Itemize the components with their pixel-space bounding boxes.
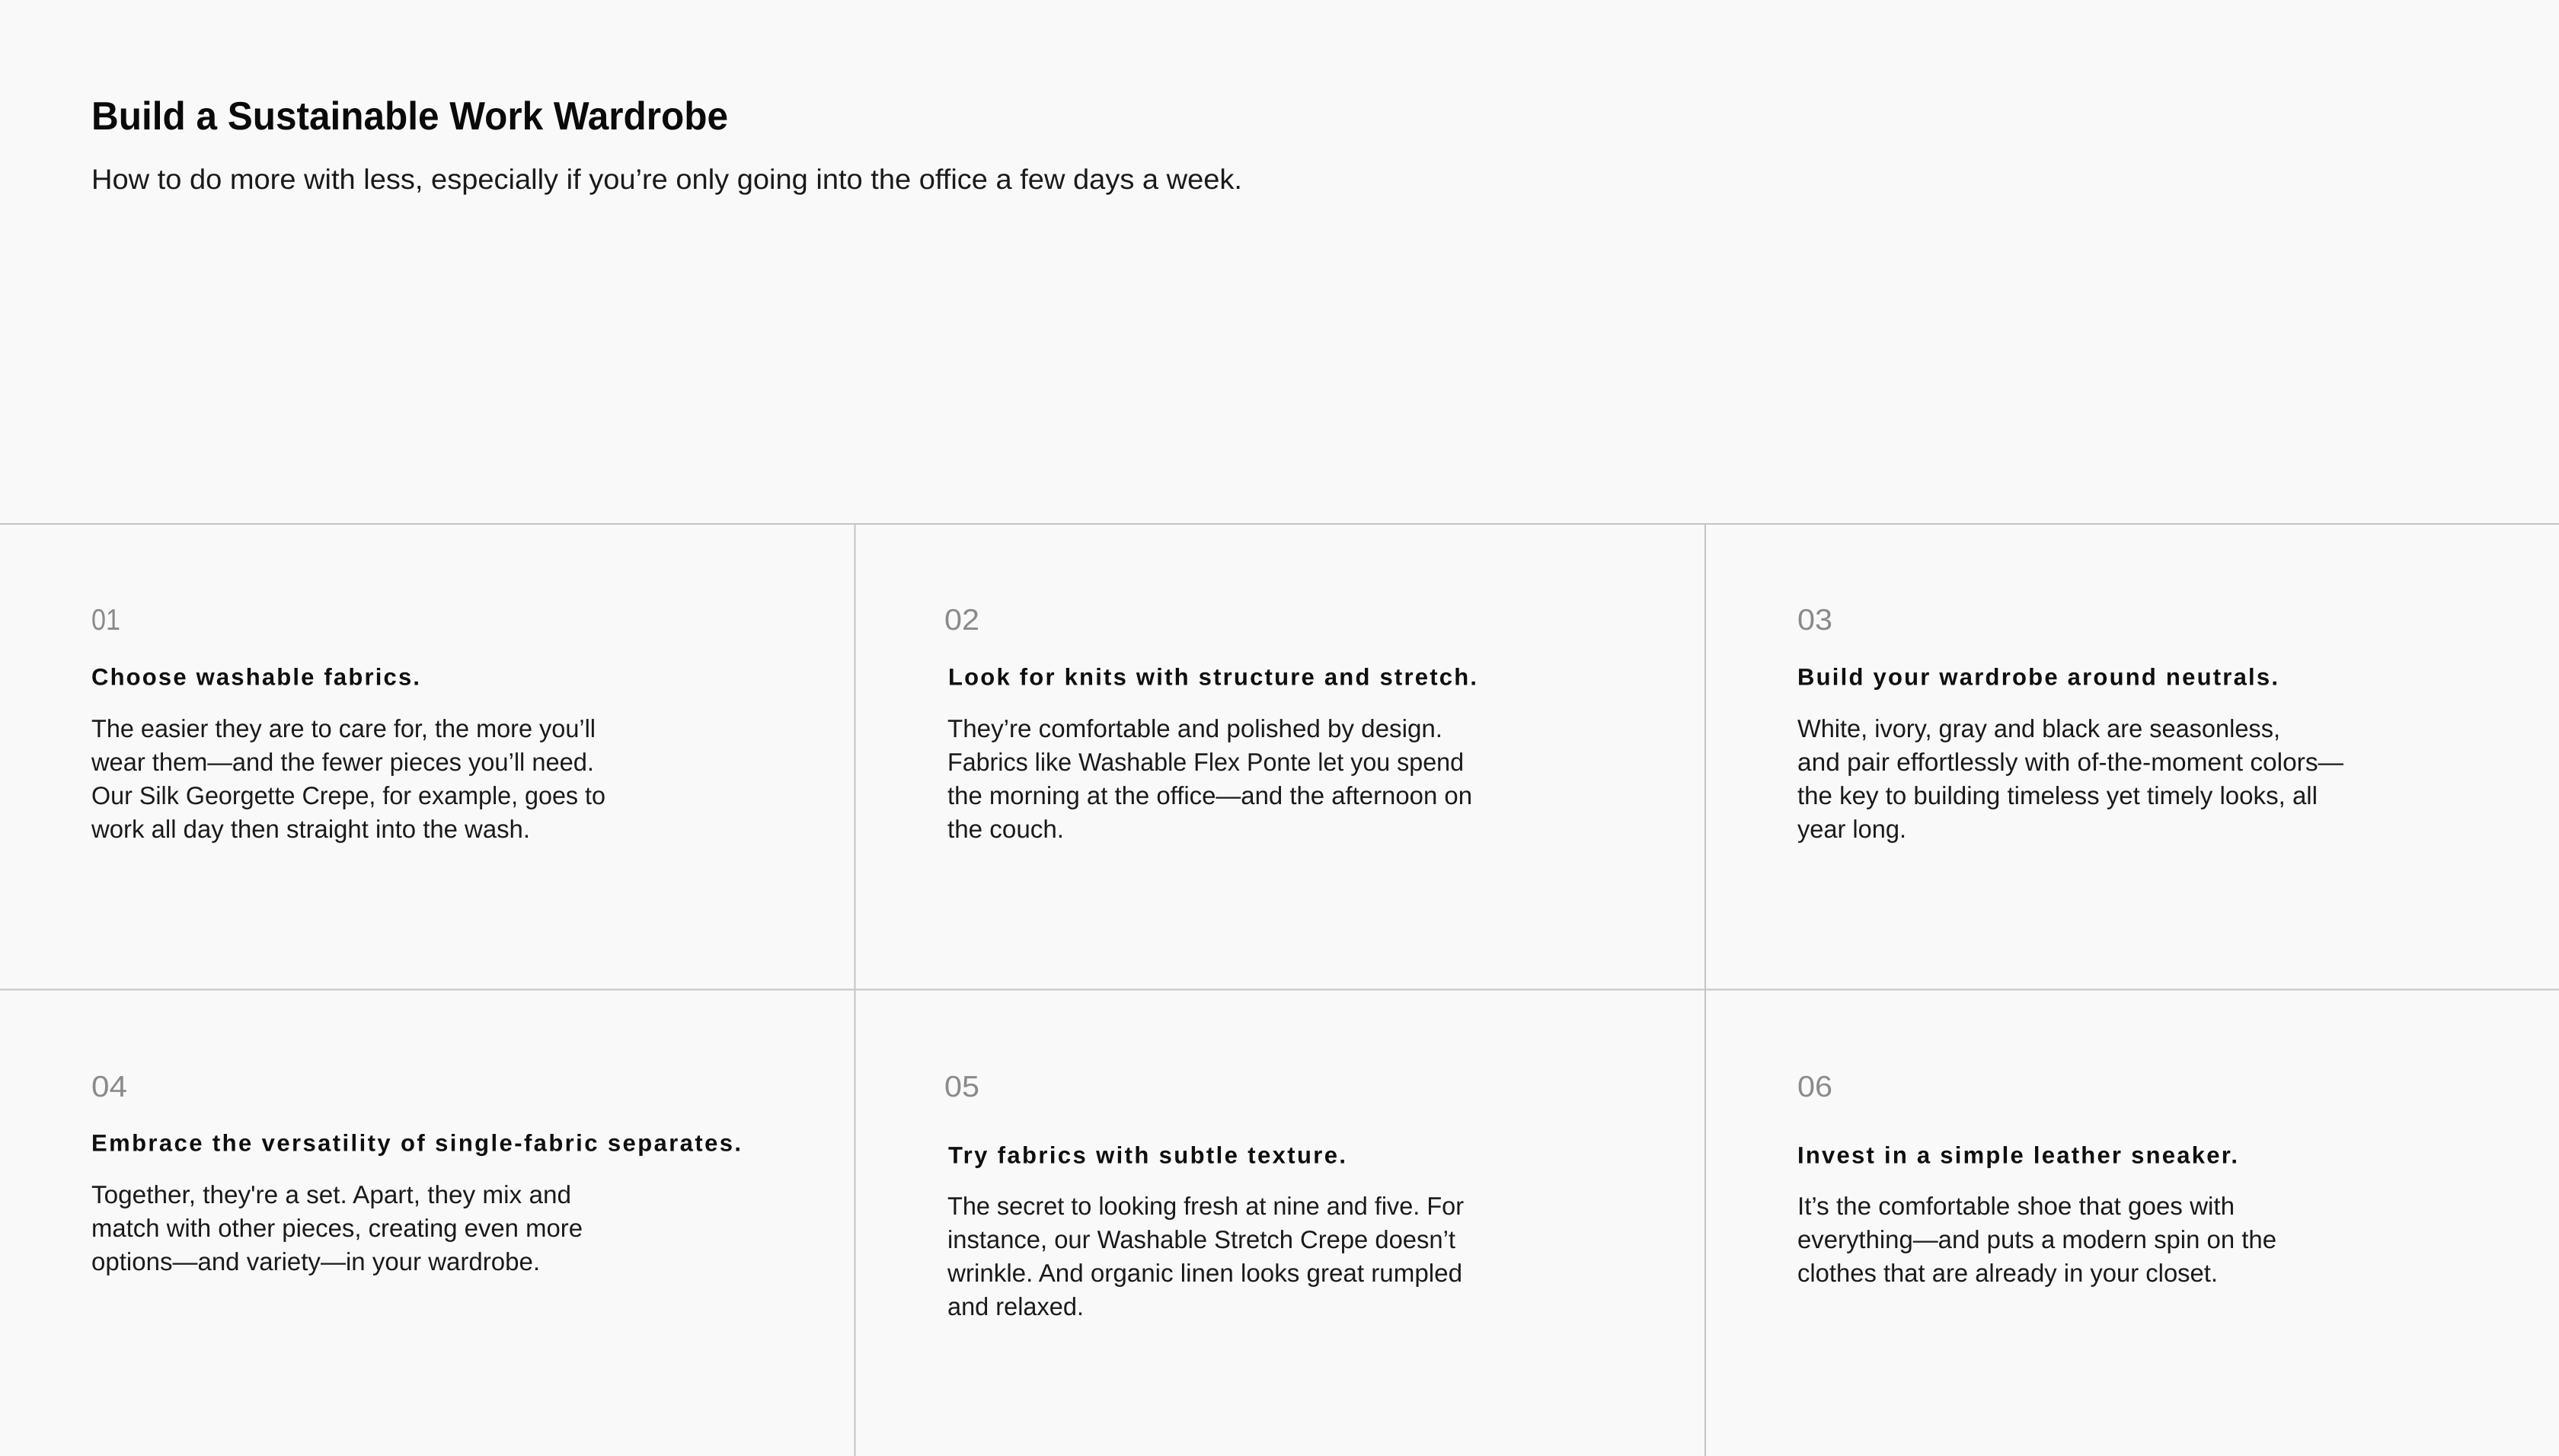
number 04: 04 (91, 1071, 127, 1103)
number 03: 03 (1797, 604, 1832, 637)
body 01: work all day then straight into the wash. (91, 815, 530, 843)
heading 06: Invest in a simple leather sneaker. (1797, 1142, 2238, 1168)
body 06: clothes that are already in your closet. (1797, 1259, 2218, 1287)
panel: tip 01 (91, 604, 605, 843)
body 03: the key to building timeless yet timely looks, all (1797, 781, 2318, 809)
panel: tip 05 (944, 1071, 1464, 1320)
body 02: They’re comfortable and polished by design. (947, 714, 1442, 742)
body 06: everything—and puts a modern spin on the (1797, 1225, 2276, 1253)
body 01 (91, 714, 605, 843)
body 02: the couch. (947, 815, 1064, 843)
panel: tip 03 (1797, 604, 2343, 843)
body 03: White, ivory, gray and black are seasonless, (1797, 714, 2280, 742)
body 06: It’s the comfortable shoe that goes with (1797, 1192, 2235, 1220)
body 01: The easier they are to care for, the more you’ll (91, 714, 596, 742)
body 01: Our Silk Georgette Crepe, for example, goes to (91, 781, 605, 809)
body 02 (947, 714, 1472, 843)
body 04: Together, they're a set. Apart, they mix and (91, 1180, 571, 1209)
panel: tip 06 (1797, 1071, 2276, 1287)
body 05: The secret to looking fresh at nine and five. For (947, 1192, 1464, 1220)
subtitle: How to do more with less, especially if you’re only going into the office a few days a week. (91, 164, 1242, 195)
heading 01: Choose washable fabrics. (91, 664, 420, 690)
header (91, 94, 1242, 195)
body 05: instance, our Washable Stretch Crepe doesn’t (947, 1225, 1455, 1253)
panel: tip 04 (91, 1071, 741, 1276)
number 06: 06 (1797, 1071, 1832, 1103)
body 06 (1797, 1192, 2276, 1287)
body 05 (947, 1192, 1464, 1320)
heading 03: Build your wardrobe around neutrals. (1797, 664, 2278, 690)
number 01: 01 (91, 604, 120, 637)
body 03: and pair effortlessly with of-the-moment colors— (1797, 748, 2343, 776)
body 05: and relaxed. (947, 1292, 1084, 1320)
heading 04: Embrace the versatility of single-fabric separates. (91, 1130, 741, 1156)
body 03: year long. (1797, 815, 1906, 843)
number 05: 05 (944, 1071, 979, 1103)
title: Build a Sustainable Work Wardrobe (91, 94, 728, 139)
body 03 (1797, 714, 2343, 843)
body 02: Fabrics like Washable Flex Ponte let you spend (947, 748, 1464, 776)
body 04: match with other pieces, creating even more (91, 1214, 583, 1242)
heading 02: Look for knits with structure and stretch. (948, 664, 1477, 690)
body 05: wrinkle. And organic linen looks great rumpled (947, 1259, 1462, 1287)
body 04 (91, 1180, 583, 1276)
body 02: the morning at the office—and the afternoon on (947, 781, 1472, 809)
number 02: 02 (944, 604, 979, 637)
body 04: options—and variety—in your wardrobe. (91, 1247, 540, 1276)
heading 05: Try fabrics with subtle texture. (948, 1142, 1346, 1168)
panel: tip 02 (944, 604, 1477, 843)
body 01: wear them—and the fewer pieces you’ll need. (91, 748, 594, 776)
